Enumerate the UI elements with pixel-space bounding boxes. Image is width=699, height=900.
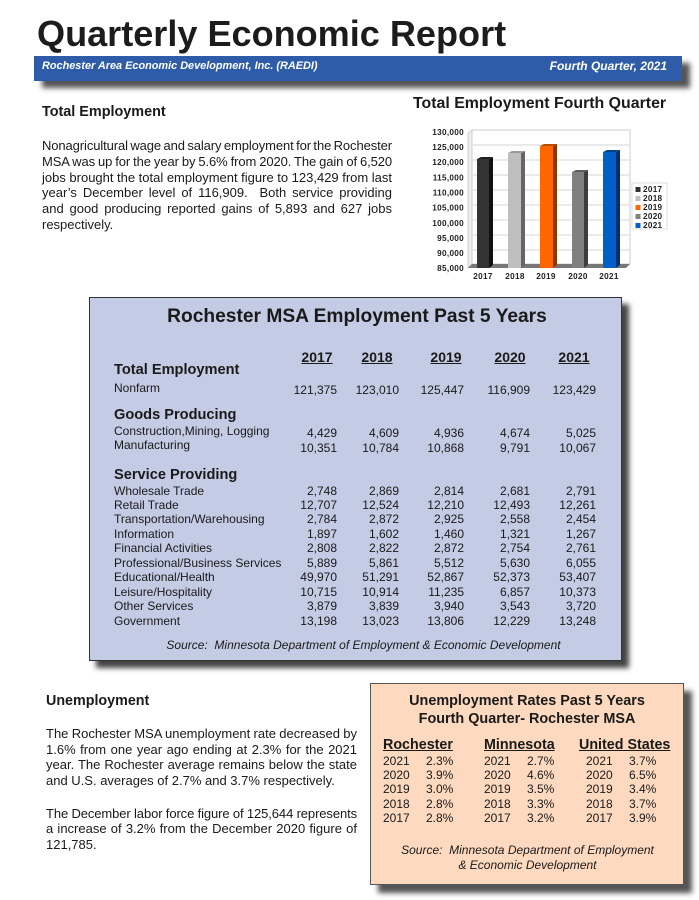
column: United States: 3.4% (629, 782, 656, 796)
row: other services: Other Services (114, 599, 193, 613)
row: financial activities: 2,822 (369, 541, 399, 555)
text block: total employment (42, 138, 392, 232)
row: manufacturing: 10,067 (559, 440, 596, 454)
row: information: 1,602 (369, 527, 399, 541)
row: construction: 4,936 (434, 426, 464, 440)
row: manufacturing (114, 438, 596, 454)
organization name: Rochester Area Economic Development, Inc. (RAEDI) (42, 60, 318, 72)
row: transportation: 2,454 (566, 512, 596, 526)
text block: unemployment (46, 726, 357, 852)
legend: 2018 (643, 194, 663, 203)
legend: 2020 (643, 212, 663, 221)
bar 2017 (477, 157, 493, 268)
y axis labels: 105,000 (432, 204, 464, 212)
column: Minnesota: 2.7% (527, 754, 554, 768)
column: United States: 2019 (586, 782, 613, 796)
text block: unemployment: The December labor force figure of 125,644 represents (46, 806, 357, 820)
row: government: Government (114, 614, 180, 628)
row: professional services: 5,630 (500, 556, 530, 570)
column: United States (579, 737, 670, 824)
row: other services (114, 599, 596, 613)
y axis labels: 110,000 (433, 188, 464, 198)
heading: chart title: Total Employment Fourth Quarter (413, 95, 666, 112)
text block: unemployment: 1.6% from one year ago ending at 2.3% for the 2021 (46, 742, 357, 756)
legend (632, 183, 667, 230)
row: wholesale trade: 2,791 (566, 484, 596, 498)
row: government: 13,198 (300, 614, 337, 628)
text block: total employment: jobs brought the total employment figure to 123,429 from last (42, 170, 392, 185)
y axis labels: 130,000 (432, 128, 464, 137)
column: United States: 6.5% (629, 768, 656, 782)
row: educational health: 51,291 (362, 570, 399, 584)
row: financial activities: Financial Activities (114, 541, 212, 555)
row: transportation: 2,784 (307, 512, 337, 526)
employment table content (114, 349, 596, 652)
row: transportation: 2,872 (369, 512, 399, 526)
column: Rochester: 2.8% (426, 810, 453, 824)
row: retail trade: 12,524 (362, 498, 399, 512)
text block: total employment: MSA was up for the year by 5.6% from 2020. The gain of 6,520 (42, 154, 392, 169)
row: nonfarm (114, 381, 596, 397)
row: government: 13,023 (362, 614, 399, 628)
row: transportation: 2,558 (500, 512, 530, 526)
row: wholesale trade: Wholesale Trade (114, 484, 204, 498)
row: construction (114, 424, 596, 440)
row: transportation: 2,925 (434, 512, 464, 526)
x axis labels (473, 272, 619, 281)
bar 2018 (508, 151, 525, 268)
row: government: 12,229 (493, 614, 530, 628)
unemployment source note: Source: Minnesota Department of Employment (401, 843, 654, 857)
unemployment panel heading (409, 693, 645, 727)
section: service providing: Service Providing (114, 467, 237, 483)
y axis labels: 85,000 (437, 264, 464, 273)
row: wholesale trade: 2,681 (500, 484, 530, 498)
row: construction: 5,025 (566, 426, 596, 440)
title: Quarterly Economic Report (37, 13, 506, 54)
legend: 2019 (643, 203, 663, 212)
row: retail trade: 12,707 (300, 498, 337, 512)
row: retail trade: 12,493 (493, 498, 530, 512)
unemployment source note: & Economic Development (458, 858, 597, 872)
row: manufacturing: 10,784 (362, 440, 399, 454)
year headers: 2017 (301, 349, 333, 365)
row: professional services: 5,889 (307, 556, 337, 570)
year headers (301, 349, 590, 365)
column: United States: 3.7% (629, 754, 656, 768)
row: professional services: 6,055 (566, 556, 596, 570)
row: government (114, 614, 596, 628)
row: nonfarm: 121,375 (294, 383, 337, 397)
quarter label: Fourth Quarter, 2021 (550, 59, 667, 73)
column: Minnesota: 2019 (484, 782, 511, 796)
y axis labels: 90,000 (437, 249, 464, 258)
row: leisure hospitality: 10,373 (559, 585, 596, 599)
text block: unemployment: and U.S. averages of 2.7% and 3.7% respectively. (46, 773, 335, 788)
text block: unemployment: year. The Rochester average remains below the state (46, 757, 357, 772)
panel heading: Rochester MSA Employment Past 5 Years (167, 306, 547, 327)
row: nonfarm: Nonfarm (114, 381, 160, 395)
row: information: Information (114, 527, 174, 541)
bar 2021 (603, 150, 620, 268)
row: educational health: 52,867 (427, 570, 464, 584)
year headers: 2019 (430, 349, 462, 365)
column: United States: 3.7% (629, 796, 656, 810)
row: educational health: 52,373 (493, 570, 530, 584)
row: other services: 3,940 (434, 599, 464, 613)
row: financial activities: 2,808 (307, 541, 337, 555)
column: United States: 2021 (586, 754, 613, 768)
row: government: 13,806 (427, 614, 464, 628)
row: nonfarm: 125,447 (421, 383, 464, 397)
row: leisure hospitality: 10,715 (300, 585, 337, 599)
row: transportation: Transportation/Warehousing (114, 512, 265, 526)
column: United States: 2017 (586, 810, 613, 824)
y axis labels: 100,000 (432, 219, 464, 228)
column: United States: 2020 (586, 768, 613, 782)
column: Minnesota: 2017 (484, 810, 511, 824)
row: financial activities (114, 541, 596, 555)
row: construction: 4,609 (369, 426, 399, 440)
row: nonfarm: 116,909 (488, 383, 530, 397)
row: wholesale trade (114, 484, 596, 498)
row: financial activities: 2,754 (500, 541, 530, 555)
y axis labels: 95,000 (437, 234, 464, 243)
bar chart (432, 128, 668, 281)
column: United States: 3.9% (629, 810, 656, 824)
column: Rochester: 3.9% (426, 768, 453, 782)
row: wholesale trade: 2,869 (369, 484, 399, 498)
row: leisure hospitality (114, 585, 596, 599)
column: Minnesota: Minnesota (484, 737, 555, 753)
y axis labels: 120,000 (432, 158, 464, 167)
text block: unemployment: The Rochester MSA unemployment rate decreased by (46, 726, 357, 741)
column: Minnesota: 2020 (484, 768, 511, 782)
column: Minnesota: 2021 (484, 754, 511, 768)
row: professional services: Professional/Business Services (114, 556, 281, 570)
row: retail trade: 12,210 (427, 498, 464, 512)
text block: total employment: Nonagricultural wage and salary employment for the Rochester (42, 138, 392, 153)
column: Rochester: 2020 (383, 768, 410, 782)
x axis labels: 2018 (505, 272, 525, 281)
unemployment source note (401, 843, 654, 872)
row: financial activities: 2,761 (566, 541, 596, 555)
row: government: 13,248 (559, 614, 596, 628)
row: educational health: 53,407 (559, 570, 596, 584)
column: Rochester: 2.3% (426, 754, 453, 768)
row: construction: Construction,Mining, Logging (114, 424, 269, 438)
row: manufacturing: 10,868 (427, 440, 464, 454)
year headers: 2021 (558, 349, 590, 365)
column: Minnesota: 4.6% (527, 768, 554, 782)
column: Rochester: 2018 (383, 796, 410, 810)
row: professional services (114, 556, 596, 570)
row: educational health: 49,970 (300, 570, 337, 584)
row: wholesale trade: 2,814 (434, 484, 464, 498)
text block: unemployment: 121,785. (46, 837, 97, 852)
text block: total employment: respectively. (42, 217, 113, 232)
column: Minnesota (484, 737, 555, 824)
row: information: 1,897 (307, 527, 337, 541)
source note: Source: Minnesota Department of Employment & Economic Development (166, 638, 561, 652)
x axis labels: 2019 (536, 272, 556, 281)
row: construction: 4,429 (307, 426, 337, 440)
row: manufacturing: 10,351 (300, 440, 337, 454)
row: leisure hospitality: Leisure/Hospitality (114, 585, 212, 599)
row: transportation (114, 512, 596, 526)
row: information: 1,267 (566, 527, 596, 541)
row: other services: 3,720 (566, 599, 596, 613)
heading: unemployment: Unemployment (46, 693, 149, 709)
row: other services: 3,543 (500, 599, 530, 613)
column: Minnesota: 3.2% (527, 810, 554, 824)
x axis labels: 2017 (473, 272, 493, 281)
row: educational health (114, 570, 596, 584)
row: retail trade (114, 498, 596, 512)
text block: unemployment: a increase of 3.2% from the December 2020 figure of (46, 821, 357, 836)
row: retail trade: 12,261 (559, 498, 596, 512)
legend: 2017 (643, 185, 663, 194)
y axis labels (432, 128, 464, 273)
row: professional services: 5,512 (434, 556, 464, 570)
row: leisure hospitality: 11,235 (428, 585, 464, 599)
row: financial activities: 2,872 (434, 541, 464, 555)
header band (34, 56, 682, 81)
y axis labels: 125,000 (432, 143, 464, 152)
panel: unemployment rates (370, 683, 684, 885)
row: information: 1,321 (500, 527, 530, 541)
heading: total employment: Total Employment (42, 104, 166, 120)
row: manufacturing: 9,791 (500, 440, 530, 454)
column: Rochester: 2019 (383, 782, 410, 796)
row: nonfarm: 123,010 (356, 383, 399, 397)
row: leisure hospitality: 6,857 (500, 585, 530, 599)
row: leisure hospitality: 10,914 (362, 585, 399, 599)
text block: total employment: year’s December level of 116,909. Both service providing (42, 185, 392, 200)
row: information: 1,460 (434, 527, 464, 541)
column: Rochester: 2017 (383, 810, 410, 824)
section: total employment: Total Employment (114, 362, 239, 378)
year headers: 2018 (361, 349, 393, 365)
bar 2020 (572, 170, 588, 268)
column: Rochester: 2.8% (426, 796, 453, 810)
unemployment panel heading: Unemployment Rates Past 5 Years (409, 693, 645, 709)
column: United States: 2018 (586, 796, 613, 810)
row: other services: 3,879 (307, 599, 337, 613)
unemployment panel heading: Fourth Quarter- Rochester MSA (419, 711, 635, 727)
x axis labels: 2020 (568, 272, 588, 281)
column: Rochester: Rochester (383, 737, 453, 753)
y axis labels: 115,000 (433, 174, 464, 182)
row: nonfarm: 123,429 (553, 383, 596, 397)
row: professional services: 5,861 (369, 556, 399, 570)
column: Minnesota: 2018 (484, 796, 511, 810)
row: wholesale trade: 2,748 (307, 484, 337, 498)
section: goods producing: Goods Producing (114, 407, 236, 423)
text block: total employment: and good producing reported gains of 5,893 and 627 jobs (42, 201, 392, 216)
chart wall and floor (468, 130, 630, 268)
year headers: 2020 (494, 349, 526, 365)
column: United States: United States (579, 737, 670, 753)
row: information (114, 527, 596, 541)
bar 2019 (540, 144, 557, 268)
column: Rochester: 3.0% (426, 782, 453, 796)
column: Minnesota: 3.3% (527, 796, 554, 810)
row: manufacturing: Manufacturing (114, 438, 190, 452)
legend: 2021 (643, 221, 663, 230)
row: other services: 3,839 (369, 599, 399, 613)
column: Minnesota: 3.5% (527, 782, 554, 796)
column: Rochester: 2021 (383, 754, 410, 768)
row: construction: 4,674 (500, 426, 530, 440)
row: educational health: Educational/Health (114, 570, 215, 584)
x axis labels: 2021 (599, 272, 619, 281)
panel: employment table (89, 297, 622, 661)
row: retail trade: Retail Trade (114, 498, 179, 512)
column: Rochester (383, 737, 453, 824)
